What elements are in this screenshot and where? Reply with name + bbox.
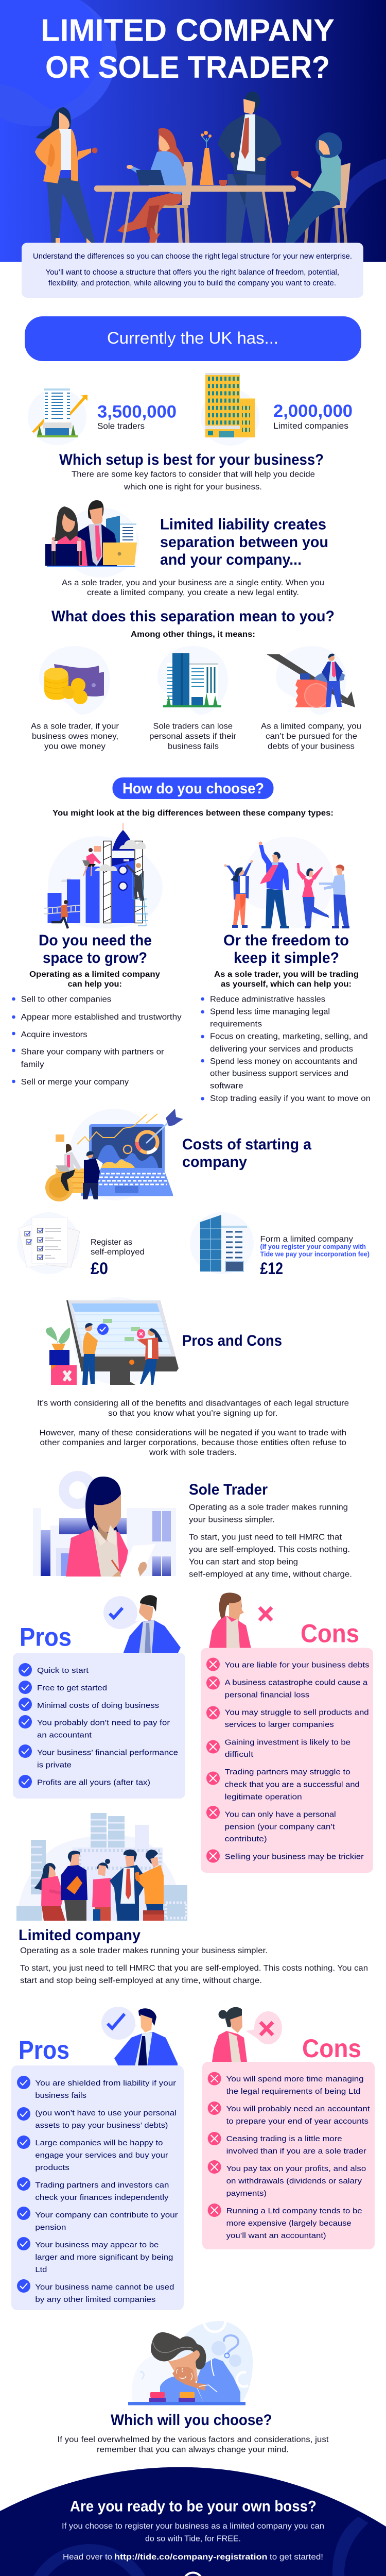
cost: self-employed: £0 — [91, 1259, 108, 1278]
pros: sole trader: Pros — [20, 1623, 72, 1652]
panel: pros list — [11, 2065, 184, 2310]
heading: limited liability: and your company... — [160, 551, 302, 568]
man with pink tie — [258, 842, 289, 928]
panel: cons list: contribute) — [225, 1835, 267, 1843]
text block: sole trader: Sole Trader — [189, 1481, 268, 1498]
panel: cons list: A business catastrophe could cause a — [225, 1679, 368, 1687]
text block: sole trader: self-employed at any time, without charge. — [189, 1570, 352, 1579]
panel: cons list: You are liable for your business debts — [225, 1661, 370, 1670]
heading: space to grow: Do you need the — [39, 932, 152, 949]
text: overwhelmed — [58, 2435, 329, 2454]
column: lose personal assets: business fails — [168, 742, 219, 751]
panel: pros list: assets to pay your business’ debts) — [35, 2121, 168, 2130]
illustration: sole trader woman — [33, 1471, 176, 1577]
column: space to grow — [12, 932, 182, 1087]
panel: cons list: Trading partners may struggle to — [225, 1768, 350, 1776]
panel: pros list: Your business name cannot be used — [35, 2283, 174, 2292]
panel: pros list: an accountant — [37, 1731, 92, 1740]
footer — [0, 2467, 386, 2576]
heading: costs of starting — [182, 1136, 311, 1171]
figure: man with check bubble — [101, 2007, 178, 2066]
panel: cons list: you’ll want an accountant) — [226, 2231, 326, 2240]
subheading: can help you: — [68, 980, 122, 989]
column: lose personal assets: Sole traders can lose — [153, 722, 233, 731]
text: worth considering: However, many of these considerations will be negated if you want to trade with — [39, 1429, 346, 1437]
panel: cons list: Running a Ltd company tends to be — [226, 2207, 362, 2215]
cost: limited company: £12 — [260, 1259, 283, 1278]
bullet list: family — [21, 1060, 44, 1069]
panel: cons list: involved than if you are a sole trader — [226, 2147, 366, 2156]
panel: cons list: to prepare your end of year accounts — [226, 2117, 369, 2126]
pros: sole trader — [13, 1595, 185, 1799]
call to action: Head over to — [63, 2553, 112, 2562]
icon: yellow tower — [201, 373, 259, 446]
subheading: among other things: Among other things, it means: — [131, 630, 255, 639]
heading: costs of starting: company — [182, 1154, 247, 1171]
bullet list: other business support services and — [210, 1070, 348, 1078]
illustration: meeting around a table — [35, 92, 350, 245]
bullet list: Focus on creating, marketing, selling, and — [210, 1032, 368, 1041]
cost: self-employed: self-employed — [91, 1248, 145, 1257]
text: register with tide: If you choose to register your business as a limited company you can — [62, 2522, 324, 2531]
pros: limited company — [11, 2007, 184, 2310]
panel: cons list: You will spend more time managing — [226, 2075, 364, 2083]
banner: currently the UK has: Currently the UK has... — [107, 329, 278, 347]
logo: tide — [178, 2573, 208, 2576]
table — [94, 185, 296, 243]
text: worth considering: work with sole traders. — [149, 1448, 237, 1457]
panel: cons list: personal financial loss — [225, 1691, 309, 1700]
bullet list: Sell to other companies — [21, 995, 111, 1004]
man 4 — [110, 1850, 148, 1921]
heading: limited liability: separation between you — [160, 534, 328, 551]
bullet list: Acquire investors — [21, 1030, 87, 1039]
text: overwhelmed: remember that you can always change your mind. — [97, 2445, 289, 2454]
illustration: business people with laptops — [45, 500, 139, 578]
subheading — [214, 970, 359, 989]
seated woman — [117, 128, 193, 243]
panel: cons list — [202, 2062, 375, 2249]
cost: limited company: Tide we pay your incorporation fee) — [260, 1250, 370, 1258]
stat: limited companies: 2,000,000 — [273, 401, 353, 421]
illustration: monitor with calendar — [46, 1297, 179, 1385]
text: worth considering: It’s worth considering all of the benefits and disadvantages of each legal structure — [37, 1399, 349, 1408]
call to action: to get started! — [270, 2553, 323, 2562]
text: worth considering: so that you know what you’re signing up for. — [108, 1409, 278, 1418]
panel: pros list: products — [35, 2163, 69, 2172]
column: limited company not pursued: can’t be pursued for the — [266, 732, 357, 741]
text: overwhelmed: If you feel overwhelmed by the various factors and considerations, just — [58, 2435, 329, 2444]
text: worth considering — [37, 1399, 349, 1457]
panel: pros list: engage your services and buy your — [35, 2151, 168, 2160]
heading: pros and cons: Pros and Cons — [182, 1332, 282, 1349]
column: keep it simple — [201, 932, 371, 1103]
cost: limited company: Form a limited company — [260, 1235, 353, 1244]
icon: blue office block — [190, 1212, 254, 1274]
heading: which will you choose: Which will you choose? — [111, 2412, 272, 2429]
bullet list — [201, 995, 371, 1103]
illustration: growing bars building — [44, 823, 163, 928]
subheading: as yourself, which can help you: — [221, 980, 352, 989]
seated woman on right — [286, 132, 350, 243]
illustration: limited company team — [16, 1813, 187, 1921]
panel: cons list: payments) — [226, 2189, 267, 2198]
panel: cons list: Selling your business may be trickier — [225, 1852, 364, 1861]
panel: cons list: You may struggle to sell products and — [225, 1708, 369, 1717]
title: OR SOLE TRADER? — [45, 50, 330, 84]
text: key factors: which one is right for your business. — [124, 483, 262, 492]
text block: sole trader: To start, you just need to tell HMRC that — [189, 1533, 342, 1541]
text: single entity: create a limited company, you create a new legal entity. — [87, 588, 299, 597]
illustration: celebrating team — [224, 837, 349, 928]
hero banner — [0, 0, 386, 262]
intro panel: flexibility, and protection, while allowing you to build the company you want to create. — [48, 279, 336, 287]
cost: self-employed: Register as — [91, 1238, 132, 1247]
woman in blue jacket — [224, 860, 253, 928]
icon: down arrow with coin and man — [267, 646, 355, 715]
heading: space to grow — [39, 932, 152, 967]
text block: sole trader: Operating as a sole trader makes running — [189, 1503, 348, 1512]
panel: pros list: check your finances independently — [35, 2193, 169, 2202]
bullet list: Sell or merge your company — [21, 1078, 129, 1087]
panel: pros list: Ltd — [35, 2265, 47, 2274]
cons: sole trader: Cons — [301, 1619, 359, 1648]
text: register with tide: do so with Tide, for FREE. — [145, 2535, 241, 2543]
intro panel — [22, 243, 363, 298]
panel: pros list: Trading partners and investors can — [35, 2181, 169, 2190]
bullet list: delivering your services and products — [210, 1045, 353, 1054]
column: you owe money: you owe money — [44, 742, 106, 751]
heading: keep it simple: keep it simple? — [234, 950, 339, 967]
bullet list: Spend less money on accountants and — [210, 1057, 357, 1066]
cons: limited company: Cons — [302, 2034, 361, 2063]
bullet list: requirements — [210, 1020, 262, 1028]
cost: limited company — [190, 1212, 370, 1278]
text: key factors: There are some key factors to consider that will help you decide — [72, 470, 315, 479]
heading: keep it simple — [223, 932, 349, 967]
panel: pros list: larger and more significant by being — [35, 2253, 173, 2262]
panel: cons list: check that you are a successful and — [225, 1781, 360, 1789]
bullet list: Reduce administrative hassles — [210, 995, 325, 1004]
panel: cons list: more expensive (largely because — [226, 2219, 352, 2228]
cons: limited company — [202, 2007, 375, 2249]
text block: sole trader: You can start and stop being — [189, 1558, 298, 1566]
woman in pink top — [297, 863, 329, 928]
panel: pros list: Large companies will be happy to — [35, 2139, 163, 2147]
column: lose personal assets: personal assets if their — [149, 732, 236, 741]
heading: limited liability: Limited liability creates — [160, 516, 326, 533]
heading: limited liability — [160, 516, 328, 568]
man in light sweater — [319, 865, 349, 928]
pros: limited company: Pros — [19, 2036, 69, 2064]
text block: limited company: Operating as a sole trader makes running your business simpler. — [20, 1946, 268, 1955]
panel: pros list: business fails — [35, 2091, 86, 2100]
panel: pros list: Your business’ financial performance — [37, 1748, 178, 1757]
panel: cons list: difficult — [225, 1750, 254, 1759]
panel: pros list — [13, 1653, 185, 1799]
woman 1 — [34, 1863, 65, 1921]
panel: cons list — [201, 1648, 373, 1873]
panel: cons list: services to larger companies — [225, 1720, 334, 1729]
badge: how do you choose: How do you choose? — [122, 781, 264, 797]
panel: cons list: You pay tax on your profits, and also — [226, 2164, 366, 2173]
vase with flowers — [200, 131, 214, 185]
stat: limited companies — [201, 373, 353, 446]
text block: limited company: To start, you just need to tell HMRC that you are self-employed. This costs nothing. You can — [20, 1964, 368, 1973]
cons: sole trader — [201, 1592, 373, 1873]
man 2 — [61, 1851, 87, 1921]
cost: self-employed — [17, 1212, 145, 1278]
stat: sole traders — [28, 388, 177, 445]
text block: sole trader: you are self-employed. This costs nothing. — [189, 1546, 350, 1554]
panel: cons list: legitimate operation — [225, 1793, 302, 1801]
panel: pros list: is private — [37, 1761, 72, 1769]
banner: currently the UK has — [25, 316, 361, 361]
column: limited company not pursued — [261, 646, 361, 751]
intro panel: Understand the differences so you can choose the right legal structure for your new enterprise. — [33, 252, 352, 261]
bullet list: Spend less time managing legal — [210, 1008, 330, 1016]
bullet list: Appear more established and trustworthy — [21, 1013, 182, 1022]
panel: pros list: Quick to start — [37, 1666, 89, 1675]
figure: woman with cross bubble — [212, 2007, 282, 2062]
panel: pros list: Free to get started — [37, 1684, 107, 1692]
bullet list: software — [210, 1082, 243, 1091]
panel: cons list: Gaining investment is likely to be — [225, 1738, 350, 1747]
standing woman — [35, 107, 98, 245]
title: LIMITED COMPANY — [41, 13, 335, 47]
icon: office building with arrow — [28, 388, 87, 445]
panel: cons list: pension (your company can’t — [225, 1823, 336, 1831]
icon: office towers — [157, 646, 228, 715]
heading: which setup: Which setup is best for your business? — [59, 451, 324, 468]
panel: pros list: Your business may appear to be — [35, 2241, 159, 2249]
standing man — [218, 92, 282, 243]
subheading: Operating as a limited company — [29, 970, 160, 979]
text block: sole trader: your business simpler. — [189, 1516, 275, 1524]
woman 3 — [92, 1859, 111, 1921]
column: limited company not pursued: As a limited company, you — [261, 722, 361, 731]
illustration: laptop with charts — [45, 1109, 183, 1201]
panel: pros list: (you won’t have to use your personal — [35, 2109, 177, 2117]
text: single entity: As a sole trader, you and your business are a single entity. When you — [62, 579, 324, 587]
stat: sole traders: 3,500,000 — [97, 402, 177, 421]
panel: cons list: Ceasing trading is a little more — [226, 2134, 342, 2143]
text: register with tide — [62, 2522, 324, 2543]
call to action: http://tide.co/company-registration — [114, 2553, 268, 2562]
icon: checklist papers — [17, 1212, 80, 1274]
column: you owe money: As a sole trader, if your — [31, 722, 119, 731]
man 5 — [135, 1850, 164, 1921]
panel: cons list: You will probably need an accountant — [226, 2105, 371, 2113]
panel: pros list: by any other limited companies — [35, 2295, 155, 2304]
text block: limited company: Limited company — [19, 1927, 141, 1944]
panel: cons list: on withdrawals (dividends or salary — [226, 2177, 362, 2185]
stat: limited companies: Limited companies — [273, 421, 348, 431]
heading: costs of starting: Costs of starting a — [182, 1136, 311, 1153]
heading: space to grow: space to grow? — [43, 950, 147, 967]
panel: pros list: Profits are all yours (after tax) — [37, 1778, 150, 1787]
intro panel: You’ll want to choose a structure that offers you the right balance of freedom, potential, — [45, 268, 339, 277]
text: worth considering: other companies and larger corporations, because those entities often refuse to — [40, 1438, 346, 1447]
column: limited company not pursued: debts of your business — [268, 742, 355, 751]
subheading — [29, 970, 160, 989]
panel: cons list: the legal requirements of being Ltd — [226, 2087, 361, 2096]
illustration: person choosing between buttons — [128, 2321, 253, 2405]
text block: sole trader — [189, 1481, 352, 1579]
text: single entity — [62, 579, 324, 597]
heading: ready to be your own boss: Are you ready to be your own boss? — [70, 2498, 317, 2515]
panel: pros list: pension — [35, 2223, 66, 2232]
subheading: As a sole trader, you will be trading — [214, 970, 359, 979]
call to action — [63, 2553, 323, 2562]
cost: limited company: (If you register your company with — [260, 1243, 366, 1250]
panel: cons list: You can only have a personal — [225, 1810, 336, 1819]
bullet list: Share your company with partners or — [21, 1048, 164, 1056]
figure: man with check bubble — [103, 1595, 181, 1654]
panel: pros list: You are shielded from liability if your — [35, 2079, 176, 2088]
column: you owe money: business owes money, — [32, 732, 118, 741]
column: lose personal assets — [149, 646, 236, 751]
panel: pros list: Your company can contribute to your — [35, 2211, 178, 2219]
heading: what does this separation mean: What does this separation mean to you? — [51, 608, 335, 625]
column: you owe money — [31, 646, 119, 751]
text block: limited company — [19, 1927, 368, 1985]
title — [41, 13, 335, 84]
panel: pros list: You probably don’t need to pay for — [37, 1719, 170, 1727]
heading: keep it simple: Or the freedom to — [223, 932, 349, 949]
bullet list: Stop trading easily if you want to move on — [210, 1094, 371, 1103]
text block: limited company: start and stop being self-employed at any time, without charge. — [20, 1976, 262, 1985]
stat: sole traders: Sole traders — [97, 421, 145, 431]
bullet list — [12, 995, 182, 1087]
icon: coins and banknotes — [39, 646, 110, 715]
figure: woman with cross — [209, 1592, 272, 1649]
text: key factors — [72, 470, 315, 492]
subheading: big differences: You might look at the big differences between these company types: — [52, 809, 334, 818]
panel: pros list: Minimal costs of doing business — [37, 1701, 159, 1710]
